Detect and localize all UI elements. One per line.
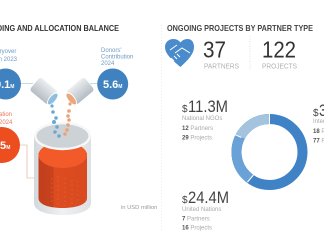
label: donors' contribution 2024: 2024: [101, 61, 115, 67]
stat: united nations: United Nations: [182, 207, 221, 213]
callout: donors' contribution value: 5.6M: [103, 79, 122, 91]
stat: international NGOs: $: [313, 108, 319, 119]
label: donors' contribution 2024: Contribution: [101, 55, 133, 61]
orange drops: [63, 102, 72, 136]
stat: partners: [203, 36, 239, 70]
liquid: [38, 142, 87, 208]
stat: national NGOs: National NGOs: [182, 116, 222, 122]
panel divider: [160, 25, 162, 232]
stat: national NGOs: 11.3M: [188, 97, 228, 116]
icon: handshake heart: [165, 39, 194, 67]
stat: national NGOs: $: [182, 104, 188, 115]
blue drops: [50, 104, 61, 138]
stat: international NGOs: [313, 101, 324, 144]
stat: national NGOs: 12 Partners: [182, 126, 213, 132]
stat: united nations: [182, 188, 229, 232]
stat: united nations: 7 Partners: [182, 216, 210, 222]
donut chart: [232, 114, 302, 185]
glass rim: [35, 123, 90, 149]
icon: left pouring cup: [29, 77, 61, 107]
glass cylinder with liquid: [34, 123, 91, 215]
label: donors' contribution 2024: Donors': [101, 48, 122, 54]
stat: united nations: 16 Projects: [182, 226, 212, 232]
icon: right pouring cup: [63, 77, 95, 107]
stat: partners: PARTNERS: [204, 64, 239, 70]
callout: carryover value: [0, 68, 33, 100]
stat: projects: 122: [262, 36, 296, 62]
stat: united nations: $: [182, 195, 188, 206]
stat: partners: 37: [203, 36, 226, 62]
stat: projects: PROJECTS: [262, 64, 297, 70]
callout: allocation value: [0, 127, 36, 178]
callout: donors' contribution value: [90, 68, 128, 100]
stat: national NGOs: 29 Projects: [182, 136, 212, 142]
divider: [249, 36, 251, 70]
unit note: in USD million: [121, 205, 157, 211]
stat: united nations: 24.4M: [188, 188, 229, 207]
stat: national NGOs: [182, 97, 228, 142]
